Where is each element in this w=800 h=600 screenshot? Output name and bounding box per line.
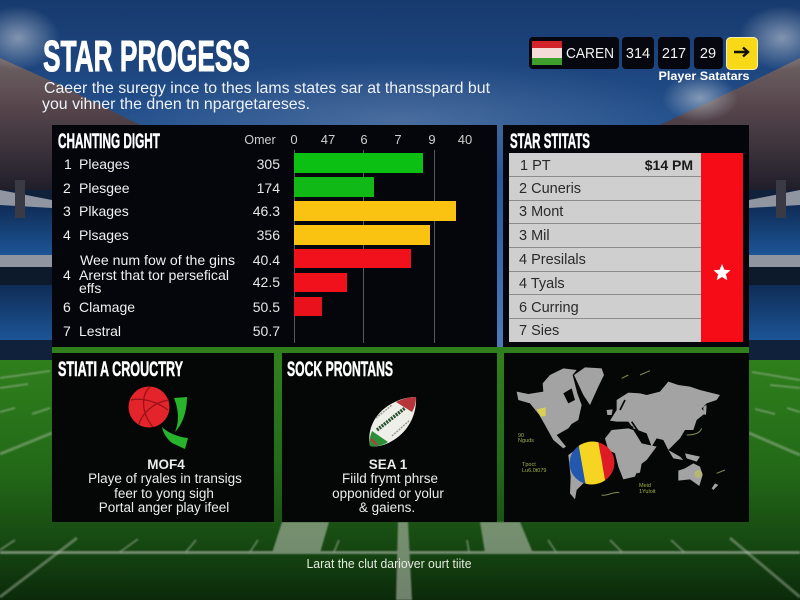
heading: changing dight: CHANTING DIGHT <box>58 130 160 153</box>
stats table: 6 Curring <box>519 300 579 316</box>
subtitle: Caeer the suregy ince to thes lams states sar at thansspard but <box>44 80 491 97</box>
stats table: $14 PM <box>645 157 693 173</box>
axis header: 40 <box>458 132 472 147</box>
row labels: Lestral <box>79 323 121 339</box>
stats table: 2 Cuneris <box>519 181 581 197</box>
body text: feer to yong sigh <box>114 486 214 501</box>
stats table <box>509 153 743 342</box>
panel: changing dight bar chart <box>52 125 497 347</box>
subtitle <box>42 80 491 113</box>
row labels: 4 <box>63 227 71 243</box>
row labels: Wee num fow of the gins <box>80 252 235 268</box>
map labels <box>518 433 656 495</box>
row labels: 6 <box>63 299 71 315</box>
scoreboard: 29 <box>700 46 716 62</box>
icon: yellow arrow button <box>726 38 758 70</box>
stats table: 3 Mont <box>519 204 563 220</box>
map labels: 90 <box>518 433 524 439</box>
icon: rugby ball <box>369 397 416 446</box>
row labels <box>63 156 235 339</box>
scoreboard: Player Satatars <box>658 71 750 83</box>
axis header: 9 <box>428 132 436 147</box>
stats table: 1 PT <box>520 158 551 174</box>
map labels: Meid <box>639 483 651 489</box>
heading: stiati a crouctry: STIATI A CROUCTRY <box>58 358 183 381</box>
stats table: 4 Presilals <box>519 252 586 268</box>
row labels: Plsages <box>79 227 129 243</box>
body text <box>332 457 444 515</box>
scoreboard <box>529 37 758 83</box>
map labels: Tpoct <box>522 462 536 468</box>
stats table: 4 Tyals <box>519 276 565 292</box>
title: STAR PROGESS <box>43 32 250 81</box>
row labels: Arerst that tor persefical <box>79 267 229 283</box>
row labels: Plkages <box>79 203 129 219</box>
row values: 50.7 <box>253 323 280 339</box>
row values: 42.5 <box>253 274 280 290</box>
body text: Portal anger play ifeel <box>99 500 229 515</box>
row labels: effs <box>79 280 101 296</box>
row labels: 2 <box>63 180 71 196</box>
row labels: 7 <box>63 323 71 339</box>
body text: MOF4 <box>147 457 185 472</box>
body text <box>88 457 242 515</box>
stats table: 3 Mil <box>519 228 550 244</box>
footer note: Larat the clut dariover ourt tiite <box>306 557 472 571</box>
heading: star stats: STAR STITATS <box>510 130 590 153</box>
row values: 174 <box>257 180 280 196</box>
stats table: 7 Sies <box>519 323 559 339</box>
row labels: Clamage <box>79 299 135 315</box>
row values: 356 <box>257 227 280 243</box>
icon: white star <box>714 264 730 280</box>
row values: 46.3 <box>253 203 280 219</box>
heading: sock prontans: SOCK PRONTANS <box>287 358 393 381</box>
row values: 40.4 <box>253 252 280 268</box>
panel: world map <box>504 353 749 522</box>
panel: stiati a crouctry <box>52 353 274 522</box>
map labels: Lu6.0t079 <box>522 468 546 474</box>
axis header: 6 <box>360 132 368 147</box>
row values: 50.5 <box>253 299 280 315</box>
panel: sock prontans <box>282 353 497 522</box>
row labels: 3 <box>63 203 71 219</box>
row values <box>253 156 280 339</box>
axis header: 0 <box>290 132 298 147</box>
row labels: Pleages <box>79 156 130 172</box>
scoreboard: 314 <box>626 46 650 62</box>
scoreboard: 217 <box>662 46 686 62</box>
row labels: Plesgee <box>79 180 130 196</box>
map labels: 1Yuloit <box>639 489 656 495</box>
body text: Fiild frymt phrse <box>342 471 438 486</box>
body text: SEA 1 <box>369 457 408 472</box>
axis header: 47 <box>321 132 335 147</box>
axis header: Omer <box>244 133 276 147</box>
scoreboard: CAREN <box>566 45 614 62</box>
icon: team flag <box>532 41 562 65</box>
body text: opponided or yolur <box>332 486 444 501</box>
map labels: Nguds <box>518 438 534 444</box>
row labels: 4 <box>63 267 71 283</box>
body text: & gaiens. <box>359 500 415 515</box>
bars <box>294 153 456 316</box>
axis header: 7 <box>394 132 402 147</box>
row values: 305 <box>257 156 280 172</box>
world map continents <box>517 367 725 499</box>
subtitle: you vihner the dnen tn npargetareses. <box>42 96 310 113</box>
icon: flag globe <box>570 442 614 484</box>
panel: star stats <box>503 125 749 347</box>
axis header <box>244 132 472 147</box>
icon: red ball and green swoosh <box>128 386 188 449</box>
body text: Playe of ryales in transigs <box>88 471 242 486</box>
row labels: 1 <box>64 156 72 172</box>
